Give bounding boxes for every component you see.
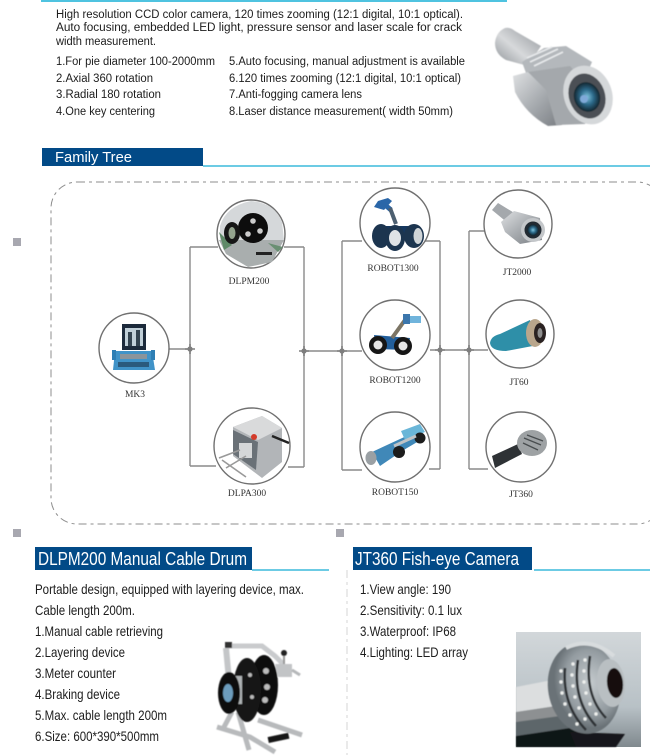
- node: ROBOT1300: [360, 188, 430, 274]
- feature list: column two: [229, 56, 465, 118]
- node: ROBOT150: [360, 412, 430, 498]
- feature list: column two: 7.Anti-fogging camera lens: [229, 89, 362, 101]
- intro paragraph: [55, 9, 463, 48]
- node: MK3: [99, 313, 169, 400]
- node: JT60: [486, 300, 554, 388]
- node: MK3: MK3: [125, 390, 145, 400]
- intro paragraph: High resolution CCD color camera, 120 times zooming (12:1 digital, 10:1 optical).: [56, 9, 463, 21]
- text block: DLPM200 description and features: 4.Braking device: [35, 686, 120, 702]
- heading: JT360 Fish-eye Camera: JT360 Fish-eye Camera: [355, 549, 520, 569]
- text block: JT360 features: 2.Sensitivity: 0.1 lux: [360, 602, 462, 618]
- node: ROBOT1300: ROBOT1300: [367, 264, 419, 274]
- intro paragraph: Auto focusing, embedded LED light, pressure sensor and laser scale for crack: [56, 22, 462, 34]
- photo: fish-eye camera: [516, 632, 641, 747]
- node: JT360: [486, 412, 556, 500]
- text block: JT360 features: [360, 581, 468, 660]
- node: DLPM200: DLPM200: [229, 277, 270, 287]
- text block: DLPM200 description and features: 1.Manual cable retrieving: [35, 623, 163, 639]
- panel: family tree diagram: [51, 182, 650, 524]
- feature list: column one: 3.Radial 180 rotation: [56, 89, 161, 101]
- node: ROBOT150: ROBOT150: [372, 488, 418, 498]
- feature list: column one: 1.For pie diameter 100-2000mm: [56, 56, 215, 68]
- heading: JT360 Fish-eye Camera: [353, 547, 650, 571]
- intro paragraph: width measurement.: [55, 36, 156, 48]
- text block: DLPM200 description and features: 5.Max. cable length 200m: [35, 707, 167, 723]
- node: JT60: JT60: [510, 378, 529, 388]
- feature list: column two: 5.Auto focusing, manual adjustment is available: [229, 56, 465, 68]
- divider between bottom panels: [346, 570, 348, 755]
- feature list: column one: [56, 56, 215, 118]
- heading: Family Tree: Family Tree: [55, 149, 132, 166]
- text block: DLPM200 description and features: Cable length 200m.: [35, 602, 135, 618]
- connector lines: [168, 231, 488, 470]
- text block: JT360 features: 3.Waterproof: IP68: [360, 623, 456, 639]
- text block: DLPM200 description and features: 6.Size: 600*390*500mm: [35, 728, 159, 744]
- node: JT2000: [484, 190, 552, 278]
- heading: Family Tree: [42, 148, 650, 167]
- feature list: column one: 2.Axial 360 rotation: [56, 73, 153, 85]
- text block: JT360 features: 4.Lighting: LED array: [360, 644, 468, 660]
- node: JT2000: JT2000: [503, 268, 532, 278]
- heading: DLPM200 Manual Cable Drum: [35, 547, 329, 571]
- marker squares: [13, 238, 344, 537]
- icon: JT2000 camera: [495, 28, 621, 131]
- feature list: column two: 8.Laser distance measurement( width 50mm): [229, 106, 453, 118]
- node: DLPA300: DLPA300: [228, 489, 266, 499]
- top accent line: [41, 0, 507, 2]
- icon: cable drum: [217, 642, 302, 752]
- node: ROBOT1200: [360, 300, 430, 386]
- text block: DLPM200 description and features: Portable design, equipped with layering device, max.: [35, 581, 304, 597]
- text block: DLPM200 description and features: 2.Layering device: [35, 644, 125, 660]
- feature list: column two: 6.120 times zooming (12:1 digital, 10:1 optical): [229, 73, 461, 85]
- text block: DLPM200 description and features: [35, 581, 304, 744]
- node: ROBOT1200: ROBOT1200: [369, 376, 421, 386]
- node: DLPM200: [217, 200, 285, 287]
- text block: JT360 features: 1.View angle: 190: [360, 581, 451, 597]
- node: DLPA300: [214, 408, 290, 499]
- text block: DLPM200 description and features: 3.Meter counter: [35, 665, 116, 681]
- feature list: column one: 4.One key centering: [56, 106, 155, 118]
- node: JT360: JT360: [509, 490, 533, 500]
- heading: DLPM200 Manual Cable Drum: DLPM200 Manual Cable Drum: [38, 549, 247, 569]
